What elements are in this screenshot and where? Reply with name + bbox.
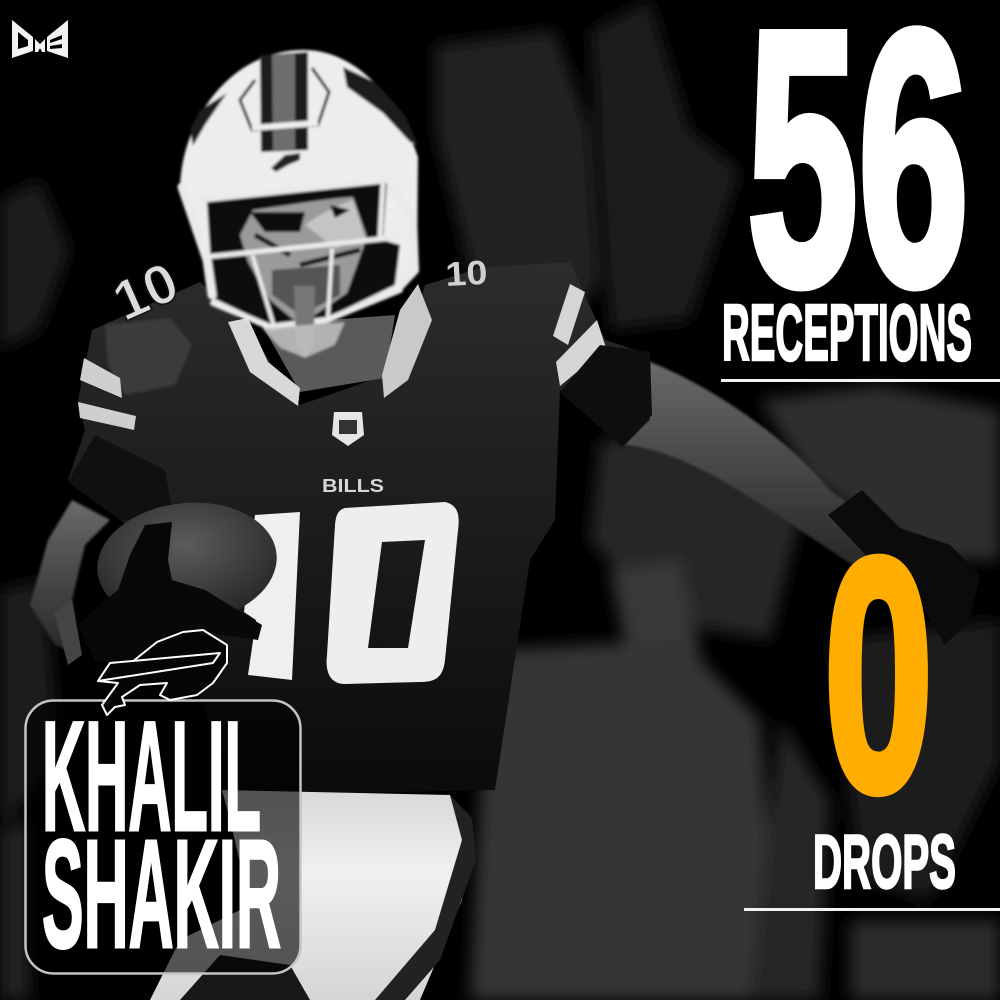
face opening [207, 183, 400, 325]
shoulder number: 10 [103, 249, 187, 333]
left sleeve [68, 435, 175, 525]
branding logo [12, 20, 68, 58]
neck [262, 315, 395, 392]
eye shadow [250, 212, 305, 232]
name panel [26, 630, 300, 980]
forehead highlight [305, 200, 365, 248]
divider [721, 379, 1000, 382]
helmet side logo left [190, 93, 227, 146]
glove [78, 522, 262, 662]
pants side stripe [375, 795, 476, 1000]
right arm [625, 358, 980, 645]
helmet front logo [271, 153, 300, 172]
stat: drops [744, 490, 1000, 911]
left shoulder highlight [105, 318, 192, 395]
face [240, 197, 367, 325]
football [91, 494, 283, 632]
panel box [26, 700, 300, 974]
helmet centre stripe [260, 52, 308, 152]
bills logo [98, 630, 227, 715]
jersey number [244, 502, 459, 684]
pants [150, 790, 472, 1000]
jersey wordmark: BILLS [322, 476, 384, 496]
left sleeve stripes [78, 358, 136, 430]
NFL shield [332, 412, 364, 446]
divider [744, 908, 1000, 911]
jersey body [68, 262, 650, 795]
collar [228, 318, 300, 406]
helmet hexagon line [240, 68, 329, 130]
chin strap [294, 286, 315, 358]
mouth shade [272, 265, 340, 315]
wrist band [54, 600, 82, 665]
shoulder number right: 10 [444, 254, 488, 294]
lower leg shadow [180, 955, 310, 1000]
stat: receptions [721, 0, 1000, 382]
infographic canvas: SHAKIR [42, 808, 281, 980]
facemask [182, 180, 414, 327]
right sleeve cuff [560, 345, 652, 447]
chin pad [262, 322, 345, 358]
left arm [30, 500, 110, 655]
right sleeve stripes [553, 284, 606, 386]
eye black [255, 235, 360, 265]
helmet shell [180, 50, 418, 327]
helmet [180, 50, 418, 358]
infographic canvas: KHALIL [42, 690, 261, 864]
helmet side logo right [343, 67, 418, 145]
